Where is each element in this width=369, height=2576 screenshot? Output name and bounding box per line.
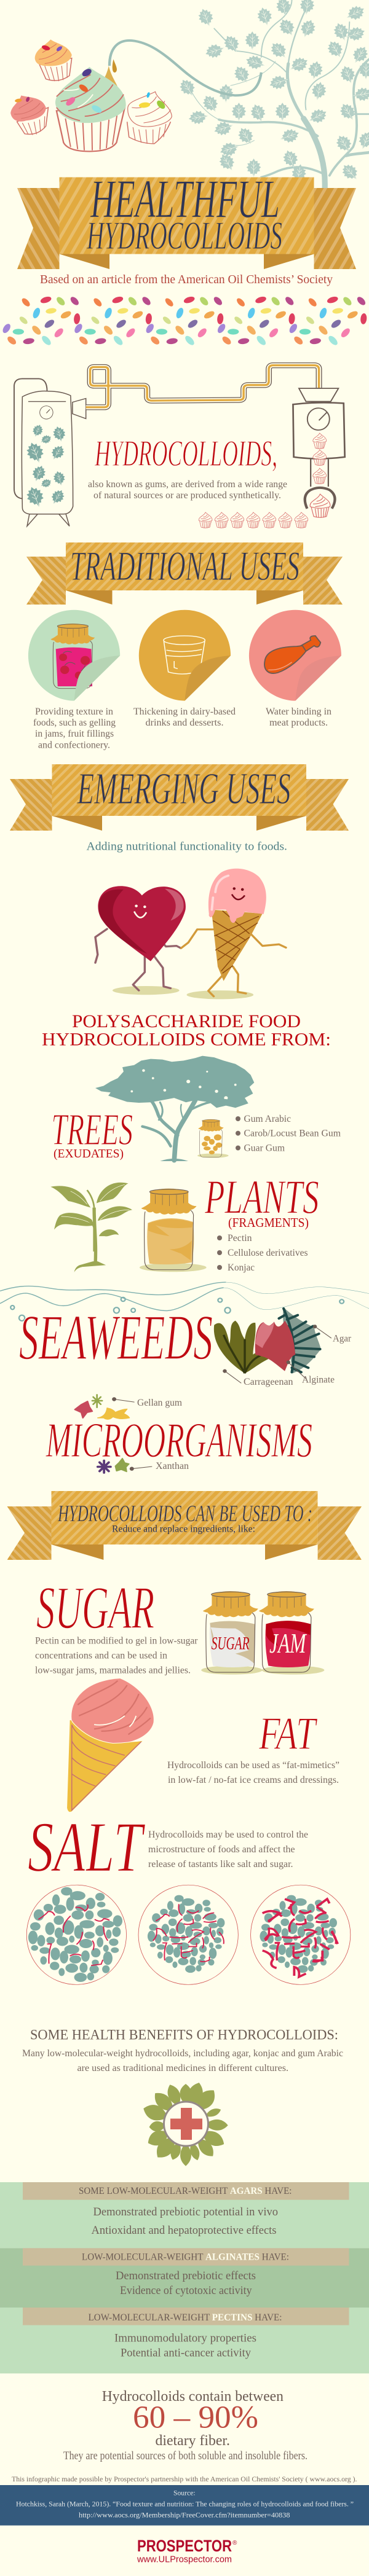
- text: traditional use captions: and confectionery.: [38, 740, 110, 751]
- text: health benefits intro: are used as traditional medicines in different cultures.: [77, 2063, 288, 2073]
- illustration: plant: [50, 1183, 132, 1272]
- list: tree gums: Carob/Locust Bean Gum: [244, 1129, 341, 1139]
- banner: traditional uses: [26, 542, 343, 605]
- panel: alginates: LOW-MOLECULAR-WEIGHT ALGINATES HAVE:: [82, 2252, 289, 2262]
- banner: can be used to: [7, 1491, 362, 1560]
- list: plant gums: Pectin: [228, 1233, 252, 1243]
- list: plant gums: [217, 1233, 308, 1273]
- panel: alginates: Evidence of cytotoxic activity: [120, 2285, 252, 2297]
- heading: trees: TREES: [52, 1105, 133, 1154]
- illustration: sugar and jam jars: [201, 1591, 324, 1675]
- illustration: small jar of gum: [197, 1119, 229, 1158]
- jelly bean band: [1, 296, 367, 346]
- diagram: low hydrocolloid concentration: [26, 1885, 127, 1984]
- illustration: cupcake machine: [199, 388, 345, 528]
- panel: source: Hotchkiss, Sarah (March, 2015). “Food texture and nutrition: The changing roles of hydrocolloids and food fibers. ”: [16, 2500, 354, 2508]
- heading: plants: (FRAGMENTS): [228, 1215, 309, 1230]
- diagram: high hydrocolloid concentration: [251, 1885, 351, 1984]
- illustration: seaweed cluster: [214, 1307, 320, 1373]
- list: plant gums: Konjac: [228, 1263, 255, 1273]
- callout: dietary fiber statistic: They are potential sources of both soluble and insoluble fibers.: [63, 2450, 308, 2462]
- diagram: medium hydrocolloid concentration: [138, 1885, 238, 1984]
- subtitle: Based on an article from the American Oil Chemists’ Society: [40, 273, 333, 286]
- illustration: cupcakes with hose and drops: [10, 39, 261, 151]
- logo: Prospector: www.ULProspector.com: [137, 2554, 232, 2565]
- callout: dietary fiber statistic: Hydrocolloids contain between: [102, 2389, 284, 2405]
- panel: source: [0, 2485, 369, 2526]
- illustration: tank with leaves: [14, 378, 86, 526]
- illustration: microbe splats and labels: Gellan gum: [137, 1398, 183, 1408]
- text: sugar description: [35, 1636, 198, 1676]
- list: tree gums: Guar Gum: [244, 1143, 285, 1154]
- banner: title ribbon: [17, 177, 356, 269]
- heading: seaweeds: SEAWEEDS: [19, 1301, 213, 1373]
- banner: can be used to: Reduce and replace ingredients, like:: [112, 1524, 255, 1535]
- text: health benefits intro: Many low-molecular-weight hydrocolloids, including agar, konjac and gum Arabic: [22, 2048, 343, 2059]
- callout: dietary fiber statistic: [63, 2389, 308, 2462]
- heading: salt: SALT: [28, 1808, 146, 1887]
- heading: polysaccharide sources: HYDROCOLLOIDS COME FROM:: [42, 1029, 331, 1049]
- text: traditional use captions: foods, such as gelling: [33, 718, 116, 728]
- panel: alginates: Demonstrated prebiotic effects: [116, 2270, 256, 2282]
- illustration: waves and bubbles: [0, 1282, 369, 1321]
- labels: seaweed types: Alginate: [302, 1375, 335, 1385]
- text: fat description: in low-fat / no-fat ice creams and dressings.: [168, 1775, 339, 1785]
- text: traditional use captions: meat products.: [269, 718, 328, 728]
- logo: Prospector: [137, 2537, 237, 2565]
- text: definition: [88, 479, 287, 501]
- text: traditional use captions: drinks and desserts.: [145, 718, 224, 728]
- text: salt description: microstructure of foods and affect the: [148, 1844, 295, 1855]
- panel: agars: [0, 2182, 369, 2248]
- text: health benefits intro: [22, 2048, 343, 2073]
- heading: sugar: SUGAR: [36, 1575, 154, 1642]
- illustration: gold pipe: [86, 366, 319, 407]
- text: salt description: [148, 1830, 308, 1869]
- text: sugar description: low-sugar jams, marmalades and jellies.: [35, 1665, 191, 1676]
- callout: dietary fiber statistic: dietary fiber.: [155, 2433, 230, 2449]
- illustration: heart character: [95, 886, 186, 995]
- sticker: chicken drumstick: [249, 610, 341, 701]
- heading: health benefits: SOME HEALTH BENEFITS OF HYDROCOLLOIDS:: [30, 2027, 338, 2043]
- text: traditional use captions: [33, 707, 331, 751]
- text: sugar description: Pectin can be modified to gel in low-sugar: [35, 1636, 198, 1646]
- panel: alginates: [0, 2248, 369, 2308]
- text: traditional use captions: in jams, fruit fillings: [35, 729, 114, 739]
- heading: trees: (EXUDATES): [54, 1147, 124, 1161]
- illustration: acacia tree: [95, 1056, 254, 1161]
- panel: source: Source:: [173, 2489, 196, 2497]
- sticker: glass of milk: [139, 610, 231, 701]
- labels: seaweed types: [223, 1325, 352, 1387]
- heading: polysaccharide sources: POLYSACCHARIDE FOOD: [72, 1011, 301, 1032]
- panel: pectins: [0, 2308, 369, 2373]
- text: fat description: Hydrocolloids can be used as “fat-mimetics”: [167, 1760, 339, 1771]
- illustration: microbe splats and labels: Xanthan: [156, 1461, 189, 1471]
- panel: agars: Antioxidant and hepatoprotective effects: [91, 2225, 277, 2237]
- panel: source: http://www.aocs.org/Membership/FreeCover.cfm?itemnumber=40838: [79, 2511, 290, 2519]
- text: emerging uses caption: Adding nutritional functionality to foods.: [86, 840, 287, 853]
- labels: seaweed types: Agar: [333, 1333, 352, 1344]
- icon: medical cross in leaf wreath: [141, 2080, 228, 2166]
- heading: plants: [204, 1170, 319, 1230]
- heading: fat: FAT: [258, 1708, 318, 1759]
- text: traditional use captions: Providing texture in: [35, 707, 113, 717]
- text: sugar description: concentrations and can be used in: [35, 1651, 167, 1661]
- list: plant gums: Cellulose derivatives: [228, 1248, 308, 1258]
- text: definition: of natural sources or are produced synthetically.: [93, 490, 281, 501]
- logo: Prospector: PROSPECTOR: [137, 2537, 232, 2555]
- list: tree gums: Gum Arabic: [244, 1114, 291, 1124]
- text: fat description: [167, 1760, 339, 1785]
- text: partnership credit: This infographic made possible by Prospector's partnership with the American Oil Chemists' Society ( www.aocs.org ).: [12, 2475, 357, 2483]
- illustration: ice cream cone: [67, 1678, 154, 1812]
- text: salt description: release of tastants like salt and sugar.: [148, 1859, 293, 1869]
- title: [86, 170, 282, 258]
- text: definition: also known as gums, are derived from a wide range: [88, 479, 287, 490]
- illustration: ice cream character: [181, 869, 286, 999]
- text: traditional use captions: Water binding in: [266, 707, 331, 717]
- labels: seaweed types: Carrageenan: [244, 1377, 293, 1387]
- sticker: jam jar: [28, 610, 120, 701]
- panel: agars: SOME LOW-MOLECULAR-WEIGHT AGARS HAVE:: [79, 2186, 292, 2196]
- illustration: sugar and jam jars: SUGAR: [212, 1634, 250, 1654]
- text: salt description: Hydrocolloids may be used to control the: [148, 1830, 308, 1840]
- callout: dietary fiber statistic: 60 – 90%: [133, 2400, 258, 2435]
- panel: pectins: LOW-MOLECULAR-WEIGHT PECTINS HAVE:: [89, 2312, 282, 2323]
- illustration: sugar and jam jars: JAM: [269, 1627, 307, 1659]
- text: traditional use captions: Thickening in dairy-based: [133, 707, 236, 717]
- panel: agars: Demonstrated prebiotic potential in vivo: [93, 2206, 278, 2218]
- illustration: leafy vine tree: [177, 0, 369, 189]
- illustration: large jar of plant fragments: [140, 1189, 207, 1272]
- heading: trees: [52, 1105, 133, 1161]
- logo: Prospector: ®: [232, 2540, 237, 2547]
- list: tree gums: [236, 1114, 341, 1154]
- banner: emerging uses: [10, 764, 349, 831]
- heading: polysaccharide sources: [42, 1011, 331, 1049]
- panel: pectins: Immunomodulatory properties: [114, 2333, 256, 2345]
- heading: plants: PLANTS: [204, 1170, 319, 1224]
- panel: pectins: Potential anti-cancer activity: [121, 2347, 252, 2360]
- illustration: microbe splats and labels: [75, 1395, 189, 1473]
